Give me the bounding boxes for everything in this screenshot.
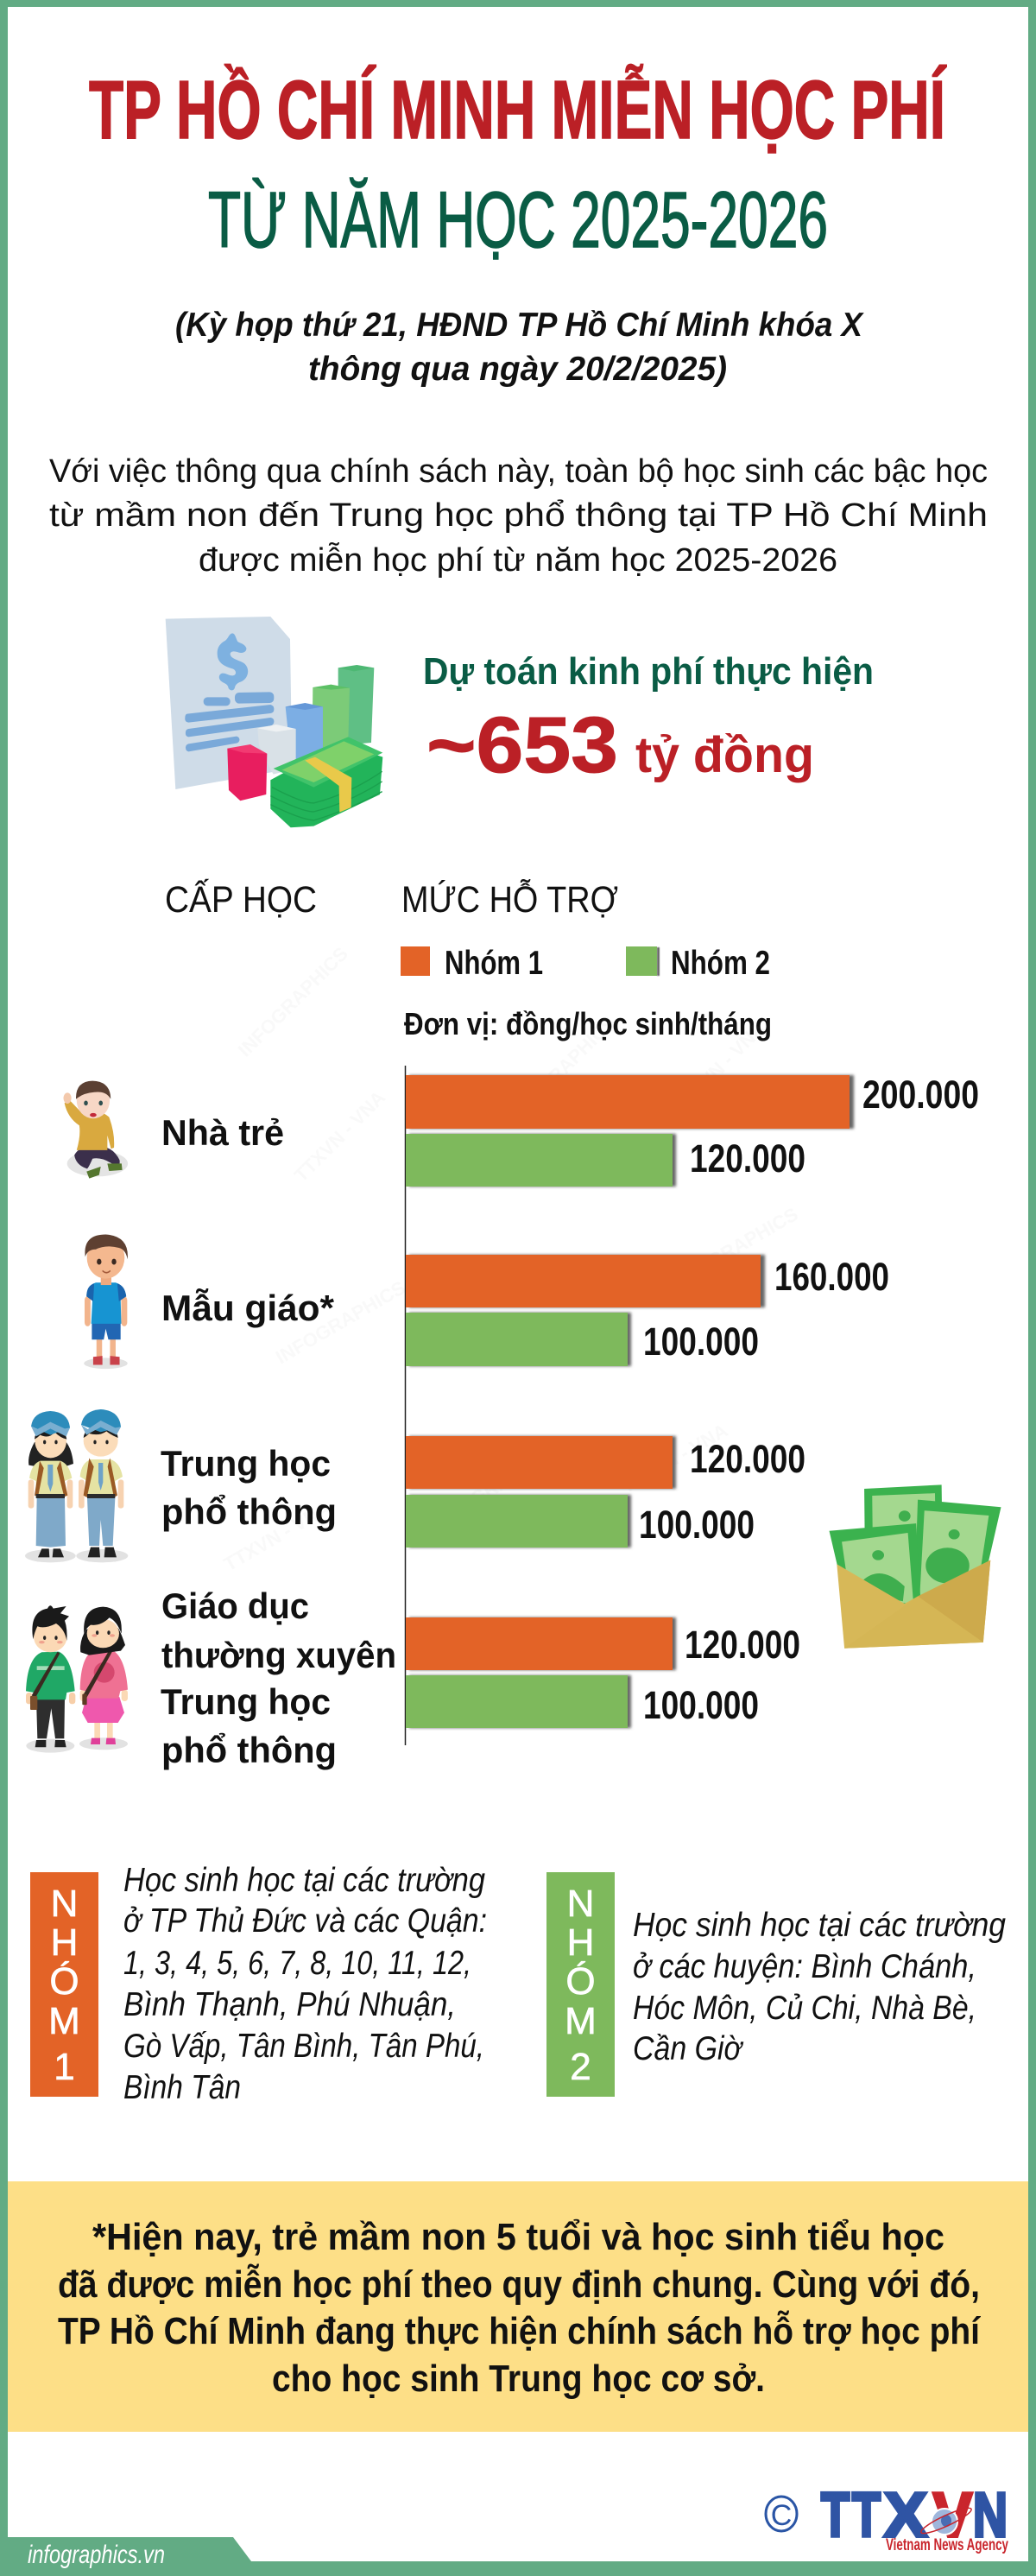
group 1 description: Học sinh học tại các trường bbox=[123, 1862, 485, 1899]
copyright symbol bbox=[766, 2497, 797, 2532]
icon: budget document with bar chart and money bbox=[166, 617, 382, 827]
boy student bbox=[76, 1409, 128, 1562]
text: TTXVN - VNA bbox=[670, 1017, 769, 1117]
text: INFOGRAPHICS bbox=[502, 1012, 620, 1130]
bar values: 100.000 bbox=[643, 1320, 759, 1364]
bars: giáo dục thường xuyên bbox=[406, 1617, 676, 1728]
bars: nhà trẻ bbox=[406, 1075, 854, 1187]
group 1 badge bbox=[30, 1872, 98, 2097]
bars: trung học phổ thông bbox=[406, 1436, 676, 1547]
footer tab bbox=[0, 2537, 1036, 2576]
row labels: Nhà trẻ bbox=[161, 1112, 284, 1153]
group 1 badge: 1 bbox=[54, 2046, 75, 2088]
row labels: Giáo dục bbox=[161, 1585, 309, 1626]
row labels: Mẫu giáo* bbox=[161, 1287, 335, 1328]
bar values: 100.000 bbox=[639, 1503, 755, 1547]
group 1 badge: N bbox=[51, 1883, 78, 1925]
footer tab: infographics.vn bbox=[28, 2541, 165, 2569]
text: TTXVN - VNA bbox=[617, 1420, 731, 1497]
group 1 description: 1, 3, 4, 5, 6, 7, 8, 10, 11, 12, bbox=[123, 1945, 471, 1982]
budget callout bbox=[423, 650, 874, 789]
intro text block: từ mầm non đến Trung học phổ thông tại TP Hồ Chí Minh bbox=[49, 497, 988, 534]
text: INFOGRAPHICS bbox=[665, 1203, 802, 1294]
callout label: Dự toán kinh phí thực hiện bbox=[423, 650, 874, 693]
panel: footnote: *Hiện nay, trẻ mầm non 5 tuổi và học sinh tiểu học bbox=[92, 2216, 944, 2258]
text: INFOGRAPHICS bbox=[272, 1276, 409, 1368]
group 2 badge bbox=[546, 1872, 615, 2097]
group 1 badge: M bbox=[48, 2000, 80, 2042]
text: TTXVN - VNA bbox=[220, 1497, 334, 1575]
legend: Nhóm 1 bbox=[445, 945, 543, 982]
row labels: Trung học bbox=[161, 1681, 331, 1722]
bar values: 100.000 bbox=[643, 1683, 759, 1727]
row labels: Trung học bbox=[161, 1443, 331, 1484]
row labels: phổ thông bbox=[161, 1491, 337, 1532]
unit note: Đơn vị: đồng/học sinh/tháng bbox=[404, 1006, 772, 1041]
bar values bbox=[639, 1073, 979, 1727]
group 2 block bbox=[546, 1872, 1006, 2097]
girl in pink bbox=[79, 1607, 128, 1750]
text: INFOGRAPHICS bbox=[234, 943, 352, 1061]
copyright symbol: C bbox=[771, 2499, 792, 2532]
callout amount: ~653 bbox=[426, 701, 618, 789]
row labels: thường xuyên bbox=[161, 1635, 396, 1675]
logo: TTXVN: T bbox=[852, 2481, 881, 2550]
bar values: 160.000 bbox=[774, 1255, 889, 1299]
icon: money envelope bbox=[830, 1484, 1001, 1649]
callout unit: tỷ đồng bbox=[635, 727, 814, 783]
group 2 description: Hóc Môn, Củ Chi, Nhà Bè, bbox=[633, 1990, 976, 2027]
bar values: 200.000 bbox=[862, 1073, 979, 1117]
row labels: phổ thông bbox=[161, 1730, 337, 1770]
group 2 description bbox=[633, 1907, 1006, 2067]
group 2 badge: Ó bbox=[565, 1960, 596, 2003]
group 2 description: ở các huyện: Bình Chánh, bbox=[633, 1948, 976, 1985]
subtitle bbox=[175, 307, 864, 388]
subtitle: thông qua ngày 20/2/2025) bbox=[308, 351, 727, 388]
text: INFOGRAPHICS bbox=[427, 1440, 565, 1532]
group 2 badge: N bbox=[567, 1883, 594, 1925]
group 1 badge: H bbox=[51, 1921, 78, 1964]
panel: footnote bbox=[8, 2181, 1028, 2432]
logo: TTXVN: N bbox=[973, 2481, 1008, 2550]
group 1 badge: Ó bbox=[49, 1960, 79, 2003]
boy in green bbox=[26, 1605, 75, 1753]
legend bbox=[401, 945, 770, 982]
bar values: 120.000 bbox=[690, 1136, 805, 1180]
icon: continuing education students bbox=[26, 1605, 128, 1753]
column heading: level: CẤP HỌC bbox=[165, 879, 317, 921]
group 1 block bbox=[30, 1862, 487, 2106]
legend: Nhóm 2 bbox=[671, 945, 770, 982]
intro text block bbox=[49, 453, 988, 579]
bar values: 120.000 bbox=[690, 1437, 805, 1481]
logo: TTXVN: V bbox=[933, 2481, 972, 2550]
group 1 description: Bình Thạnh, Phú Nhuận, bbox=[123, 1986, 456, 2023]
icon: toddler bbox=[63, 1081, 128, 1179]
group 2 description: Cần Giờ bbox=[633, 2030, 744, 2067]
subtitle: (Kỳ họp thứ 21, HĐND TP Hồ Chí Minh khóa X bbox=[175, 307, 864, 344]
bar values: 120.000 bbox=[685, 1623, 800, 1667]
icon: high school students bbox=[25, 1409, 128, 1562]
group 1 description: ở TP Thủ Đức và các Quận: bbox=[123, 1902, 487, 1940]
group 1 description: Gò Vấp, Tân Bình, Tân Phú, bbox=[123, 2028, 484, 2065]
row labels bbox=[161, 1112, 396, 1770]
group 2 badge: M bbox=[565, 2000, 597, 2042]
group 2 badge: 2 bbox=[570, 2046, 591, 2088]
icon: kindergarten boy bbox=[84, 1235, 128, 1369]
group 1 description: Bình Tân bbox=[123, 2069, 241, 2106]
bar chart bbox=[406, 1066, 979, 1745]
logo: TTXVN: T bbox=[821, 2481, 850, 2550]
column heading: support: MỨC HỖ TRỢ bbox=[401, 878, 618, 921]
logo: TTXVN: X bbox=[884, 2481, 927, 2550]
group 1 description bbox=[123, 1862, 487, 2106]
intro text block: được miễn học phí từ năm học 2025-2026 bbox=[199, 541, 837, 579]
group 2 badge: H bbox=[567, 1921, 594, 1964]
intro text block: Với việc thông qua chính sách này, toàn bộ học sinh các bậc học bbox=[49, 453, 988, 490]
logo: TTXVN bbox=[821, 2481, 1008, 2554]
text: TTXVN - VNA bbox=[290, 1086, 389, 1187]
girl student bbox=[25, 1411, 76, 1562]
panel: footnote: cho học sinh Trung học cơ sở. bbox=[272, 2358, 765, 2400]
bars: mẫu giáo bbox=[406, 1255, 765, 1366]
group 2 description: Học sinh học tại các trường bbox=[633, 1907, 1006, 1944]
